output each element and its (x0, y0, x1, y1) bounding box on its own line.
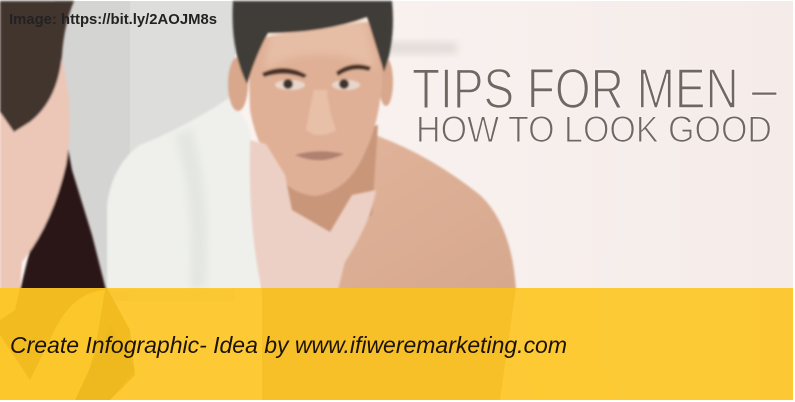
title (412, 57, 777, 150)
towel (107, 96, 262, 290)
image credit: Image: https://bit.ly/2AOJM8s (9, 12, 217, 28)
hair (233, 1, 393, 84)
yellow band underlay: shapes beneath the translucent band (0, 288, 516, 400)
yellow band (0, 288, 793, 400)
tagline: Create Infographic- Idea by www.ifiweremarketing.com (10, 332, 567, 358)
nose, mouth (306, 90, 336, 135)
man torso (262, 135, 516, 290)
hand (250, 140, 376, 290)
mirror reflection figure (0, 1, 106, 290)
man neck and face (228, 1, 393, 234)
brows, eyes (262, 68, 307, 78)
